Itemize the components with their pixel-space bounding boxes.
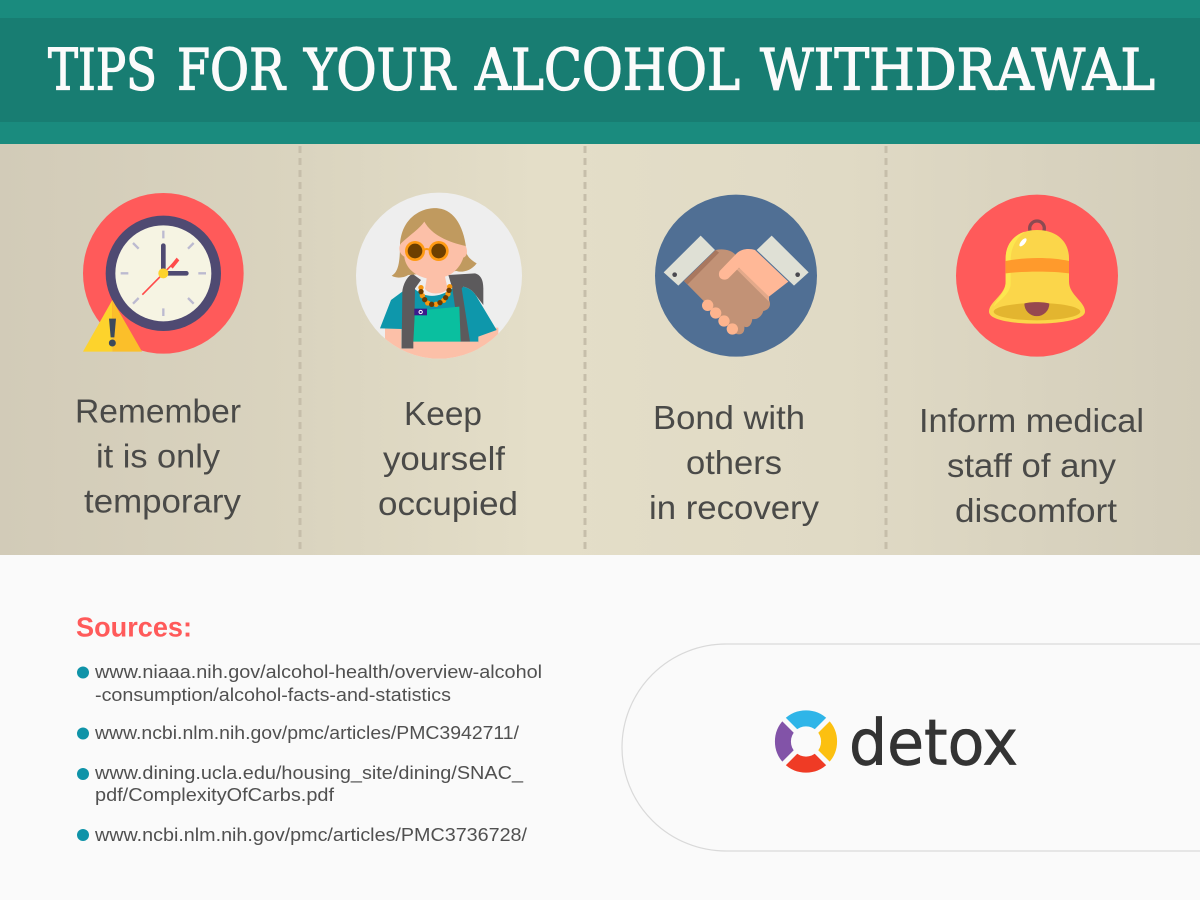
header banner bbox=[0, 0, 1200, 144]
text: inform medical staff of any discomfort: staff of any bbox=[947, 447, 1117, 484]
title: ALCOHOL bbox=[474, 38, 740, 104]
source list bbox=[77, 662, 542, 845]
title bbox=[48, 38, 1155, 104]
source list: www.ncbi.nlm.nih.gov/pmc/articles/PMC3942711/ bbox=[94, 723, 519, 743]
icon: person with backpack bbox=[356, 193, 522, 362]
source list: www.ncbi.nlm.nih.gov/pmc/articles/PMC3736728/ bbox=[94, 825, 527, 845]
tip 4: inform staff bbox=[919, 195, 1144, 529]
text: bond with others in recovery: in recovery bbox=[649, 489, 820, 526]
panel: sources bbox=[76, 612, 542, 845]
tip 2: occupied bbox=[356, 193, 522, 522]
text: keep yourself occupied: Keep bbox=[404, 395, 482, 432]
text: bond with others in recovery: Bond with bbox=[653, 399, 805, 436]
panel: tips bbox=[0, 144, 1200, 555]
text: keep yourself occupied: yourself bbox=[383, 440, 506, 477]
icon: handshake bbox=[655, 195, 817, 357]
text: inform medical staff of any discomfort: discomfort bbox=[955, 492, 1117, 529]
text: bond with others in recovery bbox=[649, 399, 820, 526]
title: TIPS bbox=[48, 38, 157, 104]
text: keep yourself occupied: occupied bbox=[378, 485, 518, 522]
text: bond with others in recovery: others bbox=[686, 444, 782, 481]
text: remember it is only temporary: temporary bbox=[84, 482, 242, 520]
source list: pdf/ComplexityOfCarbs.pdf bbox=[95, 785, 335, 805]
tip 1: temporary bbox=[75, 193, 244, 519]
title: WITHDRAWAL bbox=[760, 38, 1155, 104]
text: keep yourself occupied bbox=[378, 395, 518, 522]
text: remember it is only temporary bbox=[75, 392, 242, 520]
heading: sources: Sources: bbox=[76, 612, 192, 642]
text: remember it is only temporary: it is only bbox=[96, 438, 221, 474]
source list: www.dining.ucla.edu/housing_site/dining/SNAC_ bbox=[94, 763, 524, 784]
logo pill bbox=[622, 644, 1200, 851]
text: remember it is only temporary: Remember bbox=[75, 392, 241, 430]
icon: clock with warning triangle bbox=[83, 193, 244, 354]
icon: bell bbox=[956, 195, 1118, 357]
text: inform medical staff of any discomfort bbox=[919, 402, 1144, 529]
source list: -consumption/alcohol-facts-and-statistics bbox=[95, 685, 451, 705]
source list: www.niaaa.nih.gov/alcohol-health/overview-alcohol bbox=[94, 662, 542, 682]
logo: detox ring bbox=[776, 712, 836, 772]
text: inform medical staff of any discomfort: Inform medical bbox=[919, 402, 1144, 439]
title: FOR bbox=[177, 38, 287, 104]
tip 3: bond bbox=[649, 195, 820, 526]
title: YOUR bbox=[303, 38, 457, 104]
logo: detox wordmark: detox bbox=[849, 706, 1018, 780]
